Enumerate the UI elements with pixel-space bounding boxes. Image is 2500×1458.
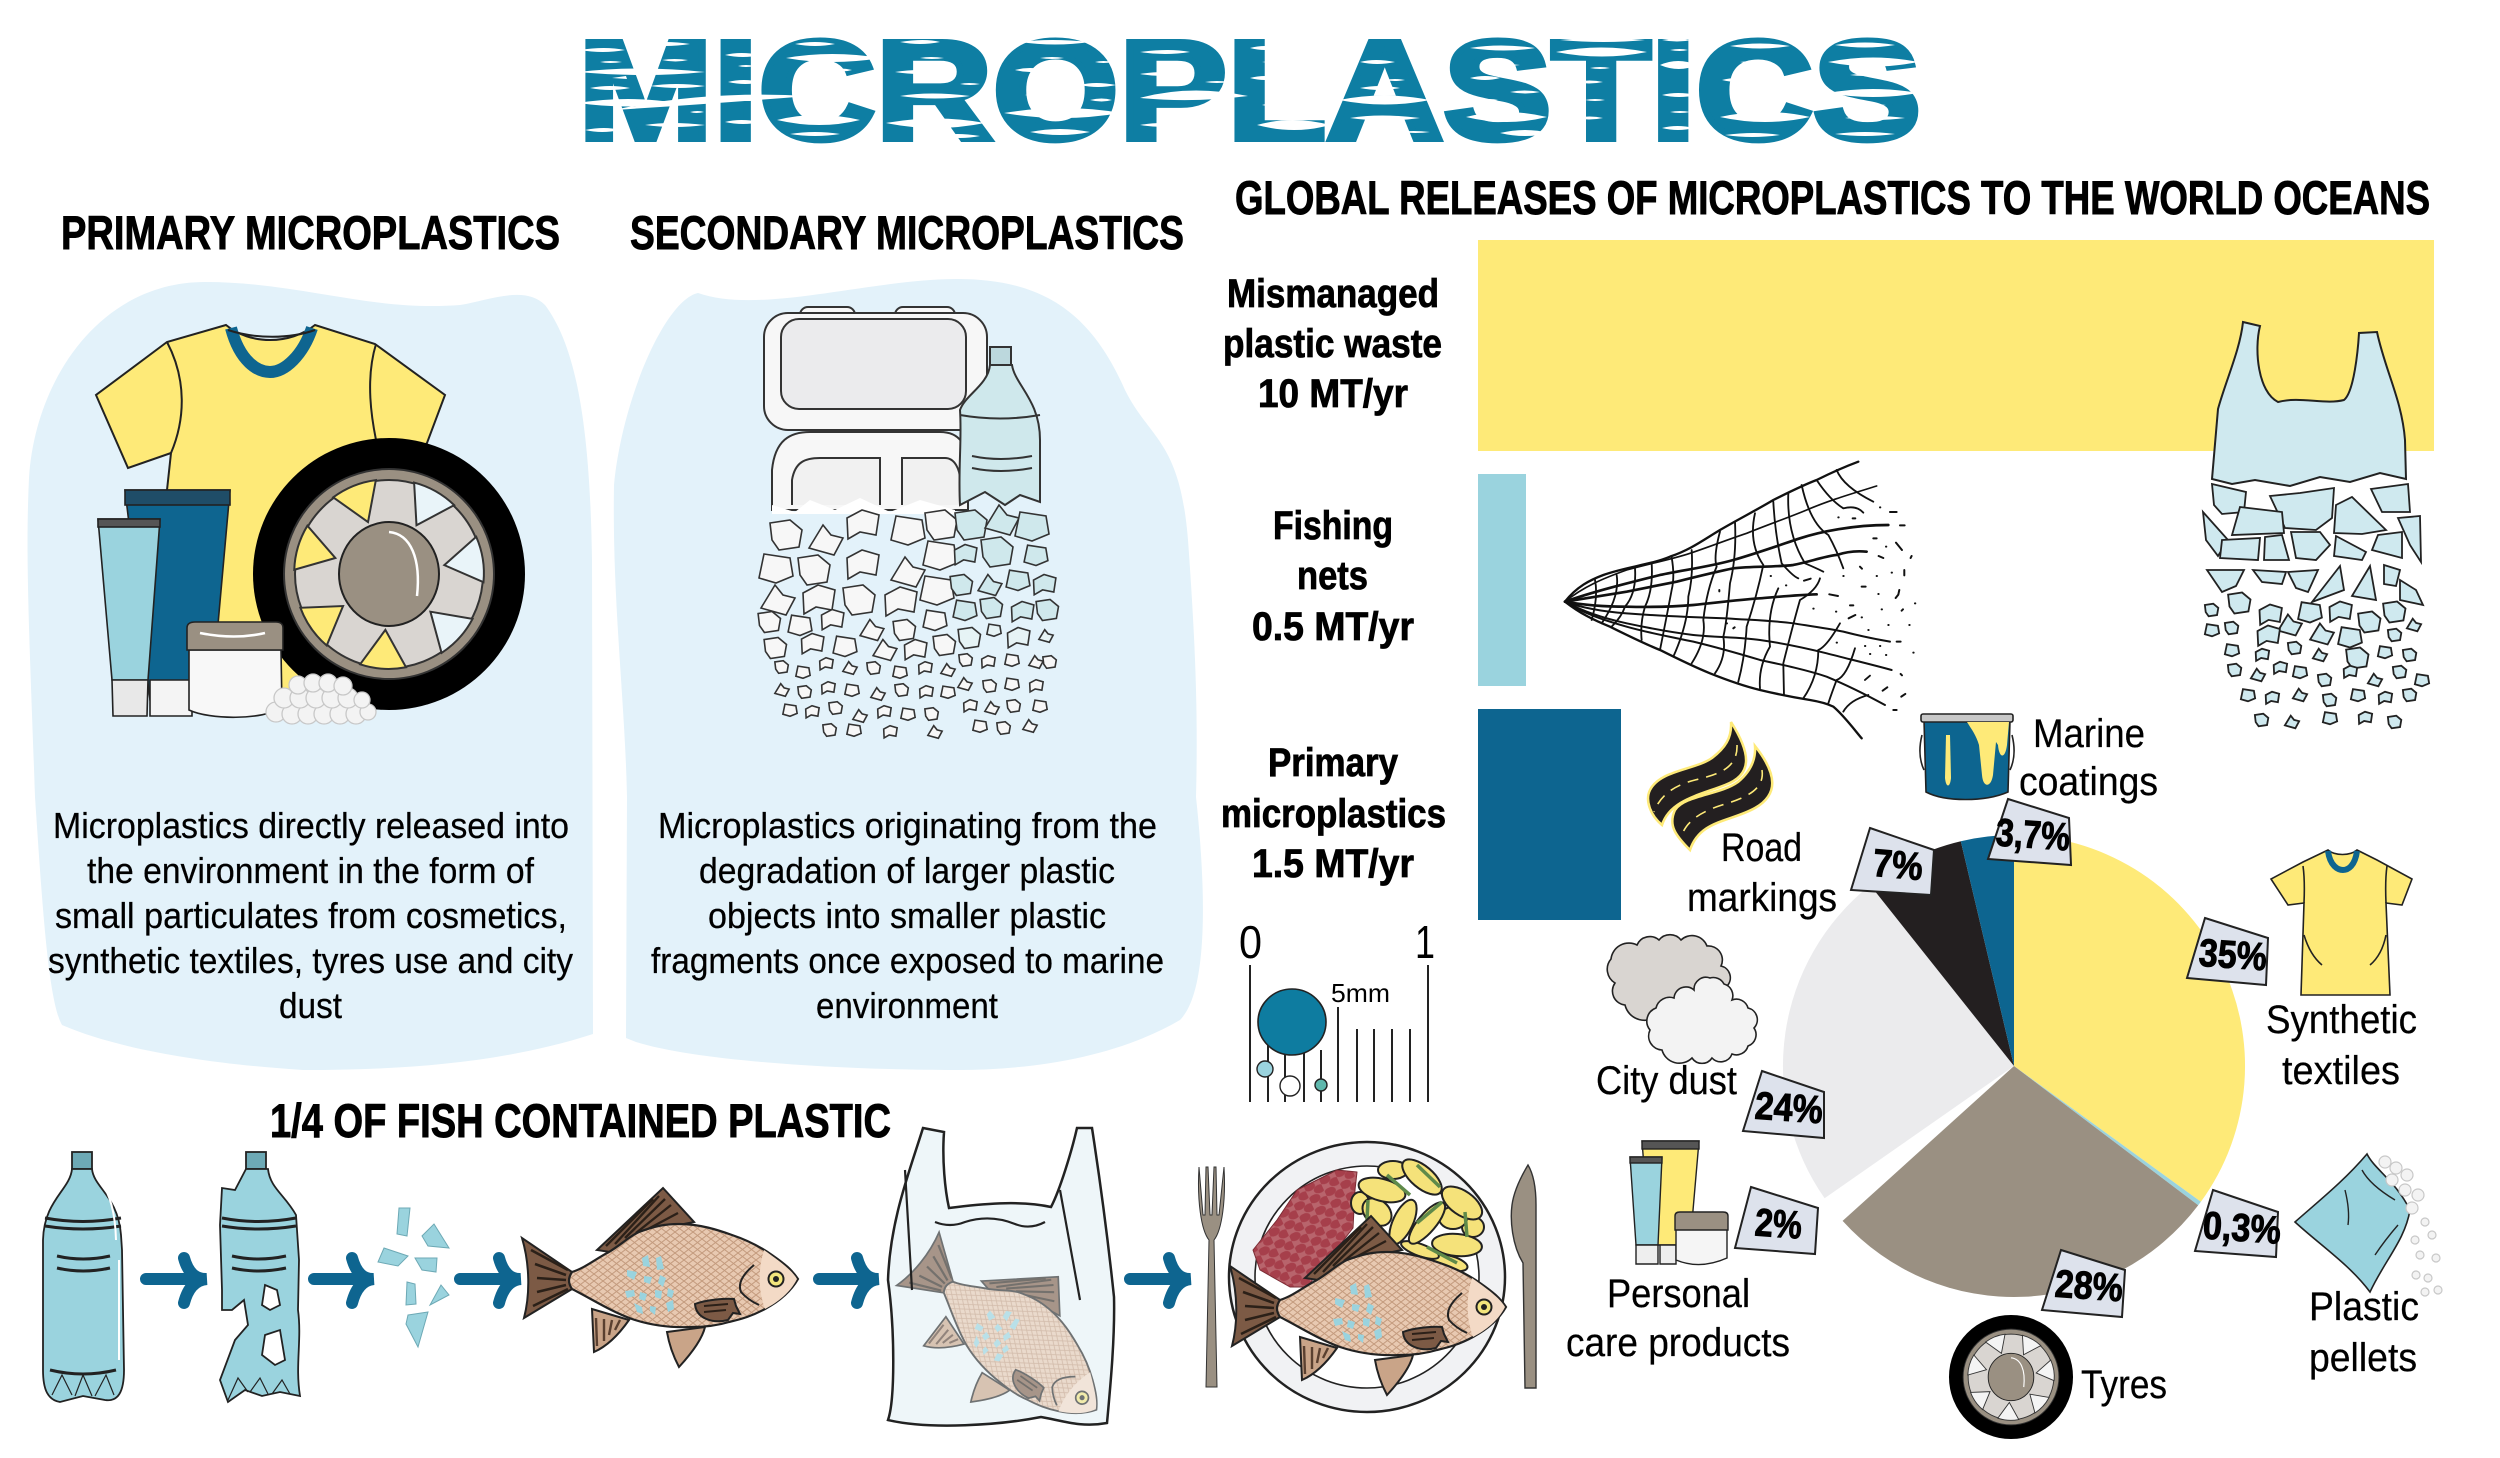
text block: primary description: Microplastics directly released into (53, 805, 569, 846)
label: primary microplastics: microplastics (1221, 792, 1446, 836)
icon: knife (1511, 1165, 1536, 1388)
label: fishing nets: nets (1297, 554, 1368, 598)
icon: paint can (1920, 714, 2014, 800)
icon: damaged bottle (220, 1152, 300, 1402)
label: 3,7%: 3,7% (1995, 811, 2071, 860)
text block: primary description (48, 805, 573, 1026)
label: 2% (1735, 1187, 1818, 1254)
icon: cosmetic jar (187, 622, 283, 717)
pie chart (1783, 835, 2245, 1297)
label: plastic pellets (2309, 1285, 2419, 1380)
scale label 5mm: 5mm (1331, 978, 1390, 1008)
arrow 4 (819, 1258, 879, 1303)
icon: personal care products (1630, 1141, 1728, 1265)
text block: primary description: small particulates from cosmetics, (55, 895, 567, 936)
heading: secondary microplastics: SECONDARY MICROPLASTICS (630, 206, 1184, 259)
icon: plastic bag with fish (869, 1128, 1146, 1458)
icon: city dust clouds (1607, 935, 1757, 1063)
label: tyres: Tyres (2081, 1363, 2167, 1407)
icon: fork (1198, 1167, 1225, 1387)
label: marine coatings: coatings (2019, 760, 2158, 804)
fragments: white food box (758, 498, 957, 738)
icon: small tyre (1949, 1315, 2073, 1439)
icon: clamshell food box (764, 307, 987, 510)
label: 35% (2187, 918, 2268, 985)
icon: fish (522, 1188, 798, 1367)
label: fishing nets (1252, 504, 1414, 649)
label: 24% (1743, 1071, 1824, 1138)
fragments: blue bottle (950, 505, 1058, 734)
particle: light blue (1257, 1061, 1273, 1077)
label: primary microplastics: Primary (1268, 741, 1399, 785)
label: road markings: markings (1687, 876, 1837, 920)
label: 0,3% (2195, 1190, 2282, 1257)
text block: secondary description: objects into smaller plastic (708, 895, 1106, 936)
bar: mismanaged plastic waste (1478, 240, 2434, 451)
icon: plate with fish and food (1229, 1142, 1506, 1412)
fragments: bag pieces (2203, 484, 2429, 728)
label: plastic pellets: pellets (2309, 1336, 2417, 1380)
scale label 1: 1 (1415, 916, 1435, 968)
label: fishing nets: Fishing (1273, 504, 1393, 548)
label: primary microplastics (1221, 741, 1446, 886)
label: plastic pellets: Plastic (2309, 1285, 2419, 1329)
icon: dark blue tube (125, 490, 230, 716)
scale label 0: 0 (1239, 916, 1262, 968)
label: 28% (2042, 1250, 2125, 1317)
text block: secondary description: Microplastics originating from the (658, 805, 1157, 846)
bar: fishing nets (1478, 474, 1526, 686)
illustration: secondary microplastics fragmentation (758, 307, 1058, 738)
label: fishing nets: 0.5 MT/yr (1252, 605, 1414, 649)
label: synthetic textiles: textiles (2282, 1049, 2400, 1093)
particle: large blue (1258, 989, 1326, 1055)
text block: secondary description: degradation of larger plastic (699, 850, 1115, 891)
label: personal care products: care products (1566, 1321, 1790, 1365)
text block: secondary description: environment (816, 985, 998, 1026)
panel: secondary microplastics (614, 279, 1203, 1070)
label: marine coatings (2019, 712, 2158, 804)
icon: fishing net (1565, 462, 1915, 738)
icon: pellet bag (2295, 1154, 2442, 1296)
icon: plastic pellets (266, 674, 376, 724)
icon: tyre (253, 438, 525, 710)
particle: teal (1315, 1079, 1327, 1091)
icon: plastic shards (378, 1208, 449, 1347)
label: personal care products (1566, 1272, 1790, 1365)
label: mismanaged plastic waste: Mismanaged (1227, 272, 1439, 316)
icon: t-shirt (96, 325, 445, 690)
icon: water bottle (959, 347, 1040, 505)
label: 24%: 24% (1753, 1085, 1824, 1132)
label: synthetic textiles: Synthetic (2266, 998, 2417, 1042)
label: city dust: City dust (1596, 1059, 1737, 1103)
arrow 3 (460, 1258, 521, 1303)
particle: white (1280, 1076, 1300, 1096)
label: 7%: 7% (1871, 842, 1925, 889)
label: road markings (1687, 826, 1837, 920)
bar: primary microplastics (1478, 709, 1621, 920)
arrow 1 (146, 1258, 207, 1303)
text block: secondary description (651, 805, 1164, 1026)
icon: light blue tube (98, 519, 160, 716)
label: 2%: 2% (1753, 1201, 1803, 1248)
arrow 2 (314, 1258, 374, 1303)
title (578, 12, 1921, 169)
label: marine coatings: Marine (2033, 712, 2145, 756)
label: 7% (1851, 828, 1934, 895)
text block: primary description: the environment in the form of (87, 850, 535, 891)
icon: road markings (1648, 722, 1772, 850)
panel: primary microplastics (28, 282, 593, 1070)
label: primary microplastics: 1.5 MT/yr (1252, 842, 1414, 886)
arrow 5 (1130, 1258, 1191, 1303)
icon: intact bottle (43, 1152, 124, 1402)
icon: small t-shirt (2271, 850, 2412, 995)
text block: primary description: dust (279, 985, 342, 1026)
label: mismanaged plastic waste: 10 MT/yr (1258, 372, 1408, 416)
label: personal care products: Personal (1607, 1272, 1750, 1316)
label: 3,7% (1988, 799, 2071, 865)
icon: plastic bag fragmenting (2203, 322, 2429, 728)
label: 35%: 35% (2197, 932, 2268, 979)
size scale (1239, 916, 1435, 1102)
label: mismanaged plastic waste (1223, 272, 1442, 416)
label: road markings: Road (1721, 826, 1802, 870)
label: 0,3%: 0,3% (2201, 1204, 2282, 1253)
label: mismanaged plastic waste: plastic waste (1223, 322, 1442, 366)
label: 28%: 28% (2053, 1263, 2124, 1310)
text block: primary description: synthetic textiles, tyres use and city (48, 940, 573, 981)
label: synthetic textiles (2266, 998, 2417, 1093)
heading: primary microplastics: PRIMARY MICROPLASTICS (61, 206, 560, 259)
heading: fish contained plastic: 1/4 OF FISH CONTAINED PLASTIC (270, 1094, 891, 1147)
text block: secondary description: fragments once exposed to marine (651, 940, 1164, 981)
illustration: primary microplastics sources (96, 325, 525, 724)
